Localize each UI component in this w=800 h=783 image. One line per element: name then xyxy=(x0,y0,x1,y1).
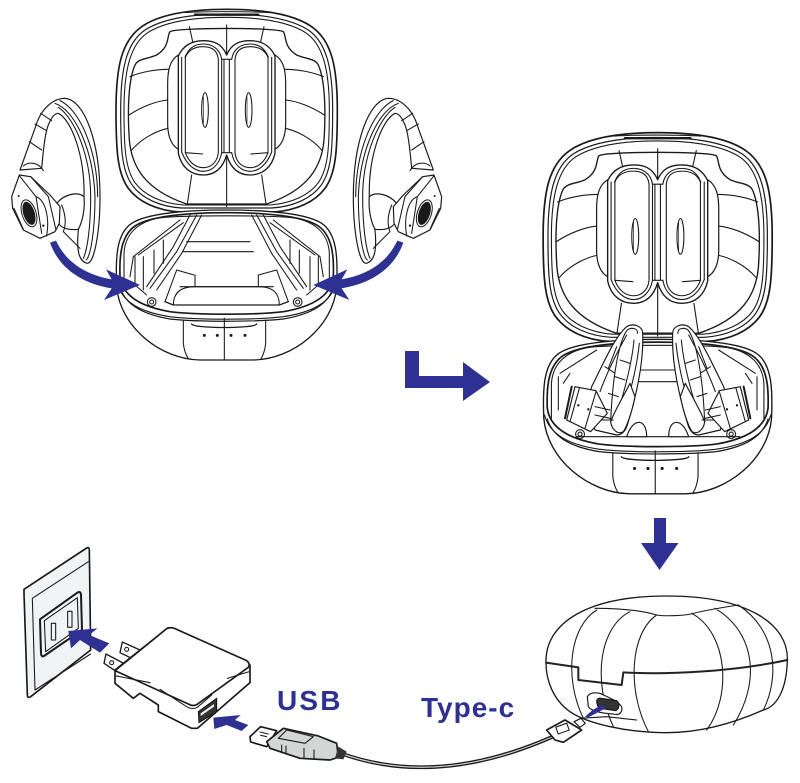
left earbud in case xyxy=(565,325,647,437)
USB label: USB xyxy=(277,685,343,716)
earbuds and open case, top left xyxy=(12,9,442,360)
arrow: plug to outlet xyxy=(68,628,109,653)
port insert arrow xyxy=(585,705,606,717)
closed charging case xyxy=(546,596,787,742)
USB wall adapter xyxy=(104,628,250,728)
arrow: cable to adapter xyxy=(213,715,248,731)
open case xyxy=(116,9,337,360)
case floor lines xyxy=(558,350,757,437)
USB charging cable xyxy=(250,727,552,767)
right earbud in case xyxy=(669,325,750,437)
arrow: right earbud into case xyxy=(313,241,403,300)
Type-c label: Type-c xyxy=(421,692,515,723)
left earbud xyxy=(12,98,100,263)
arrow: left earbud into case xyxy=(50,241,140,300)
open case xyxy=(543,133,772,494)
bent arrow to next step xyxy=(405,351,490,401)
case with earbuds placed inside xyxy=(543,133,772,494)
Type-c plug xyxy=(547,720,582,742)
right earbud xyxy=(353,98,442,263)
arrow down xyxy=(641,518,678,570)
USB plug xyxy=(250,727,347,760)
wall outlet xyxy=(24,548,91,697)
